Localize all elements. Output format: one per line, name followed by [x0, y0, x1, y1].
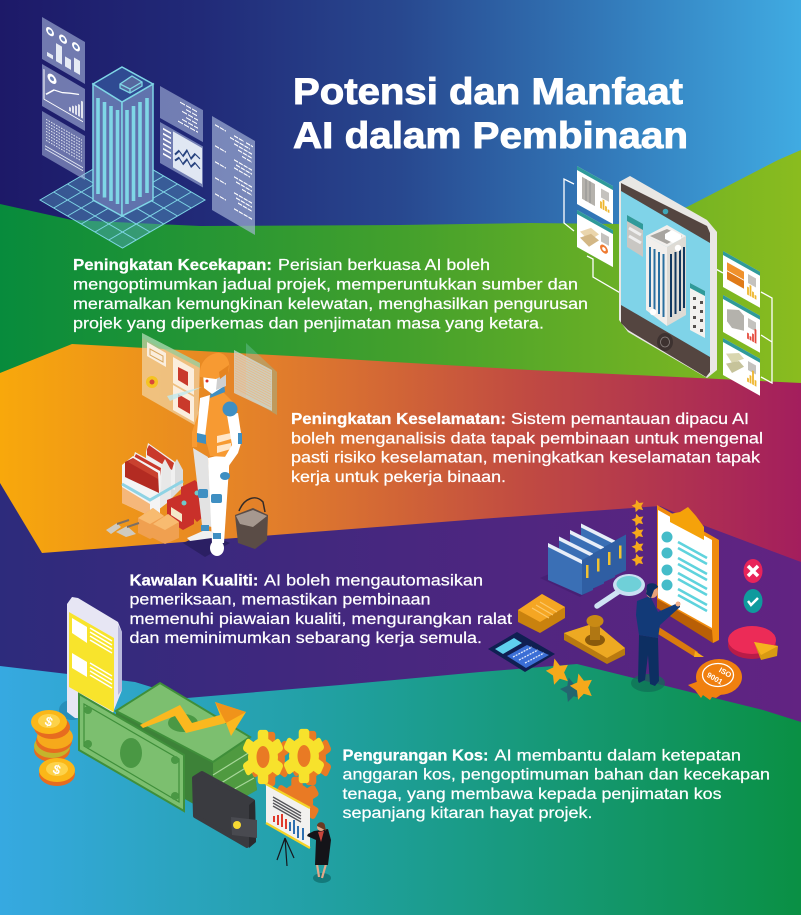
binders	[540, 524, 626, 597]
tablet body	[619, 176, 717, 378]
reject and approve badges	[744, 559, 762, 613]
text block: Pengurangan Kos: Pengurangan Kos:	[342, 747, 488, 764]
background: orange band	[0, 0, 801, 562]
gears	[242, 729, 332, 827]
gold coins: $	[51, 761, 64, 778]
card: orange blocks	[723, 251, 760, 308]
illustration: cost savings	[31, 597, 332, 883]
magnifier	[597, 574, 645, 606]
paint bucket	[235, 498, 268, 549]
illustration: digital building with data panels	[40, 17, 255, 248]
text block: Pengurangan Kos	[342, 747, 770, 822]
text block: Kawalan Kualiti: Kawalan Kualiti:	[130, 572, 258, 590]
pie chart	[728, 626, 778, 660]
panel: long document	[212, 116, 255, 235]
floor grid	[40, 152, 205, 248]
gold stars	[543, 656, 596, 703]
text block: Peningkatan Kecekapan: projek yang diperkemas dan penjimatan masa yang ketara.	[73, 316, 544, 332]
orange notepad	[518, 594, 565, 633]
panel: dense table	[42, 111, 85, 180]
card: stone slabs	[723, 338, 760, 396]
text block: Peningkatan Kecekapan: Peningkatan Kecekapan:	[73, 257, 272, 274]
tablet screen icon grid	[690, 283, 705, 338]
pencil	[637, 615, 704, 657]
text block: Peningkatan Keselamatan: boleh menganalisis data tapak pembinaan untuk mengenal	[291, 430, 763, 447]
growth arrow	[140, 702, 246, 736]
tablet screen form	[627, 215, 643, 257]
connector lines	[564, 179, 772, 383]
text block: Peningkatan Keselamatan: pasti risiko keselamatan, meningkatkan keselamatan tapak	[291, 450, 760, 466]
text block: Kawalan Kualiti: memenuhi piawaian kualiti, mengurangkan ralat	[130, 611, 513, 628]
text block: Kawalan Kualiti	[130, 572, 513, 647]
illustration: tablet with building model	[564, 166, 772, 396]
text block: Pengurangan Kos: tenaga, yang membawa kepada penjimatan kos	[342, 786, 722, 803]
robot figure	[187, 353, 242, 556]
text block: Peningkatan Kecekapan	[73, 257, 588, 332]
brick stacks	[138, 508, 179, 544]
text block: Pengurangan Kos: anggaran kos, pengoptimuman bahan dan kecekapan	[342, 766, 770, 784]
text block: Pengurangan Kos: AI membantu dalam ketepatan	[494, 747, 741, 764]
building	[93, 67, 153, 216]
trowels	[106, 520, 139, 537]
text block: Pengurangan Kos: sepanjang kitaran hayat projek.	[342, 805, 592, 822]
panel: line chart	[42, 64, 85, 131]
panel: area chart	[160, 122, 203, 188]
paint cans	[167, 480, 209, 530]
rating stars column	[630, 498, 645, 567]
text block: Kawalan Kualiti: pemeriksaan, memastikan pembinaan	[130, 592, 430, 609]
holographic data mesh	[234, 343, 277, 415]
text block: Kawalan Kualiti: dan meminimumkan sebarang kerja semula.	[130, 630, 482, 647]
gold coins: $	[43, 713, 56, 730]
red roofed house models	[122, 443, 183, 516]
ISO 9001 badge: ISO	[717, 665, 733, 680]
text block: Peningkatan Keselamatan: Peningkatan Keselamatan:	[291, 411, 506, 428]
smartphone	[59, 597, 122, 720]
text block: Peningkatan Kecekapan: Perisian berkuasa AI boleh	[278, 257, 490, 274]
title: AI dalam Pembinaan	[293, 115, 688, 156]
illustration: robot construction worker	[106, 333, 277, 557]
clipboard	[657, 505, 719, 643]
background: purple band	[0, 0, 801, 722]
ISO 9001 badge	[688, 659, 742, 700]
wallet	[194, 773, 257, 848]
card: sheets	[577, 210, 613, 267]
panel: text list	[160, 86, 203, 142]
text block: Peningkatan Kecekapan: mengoptimumkan jadual projek, memperuntukkan sumber dan	[73, 276, 578, 294]
presenter woman	[307, 822, 331, 883]
text block: Peningkatan Kecekapan: meramalkan kemungkinan kelewatan, menghasilkan pengurusan	[73, 296, 588, 313]
man reviewing	[631, 583, 680, 692]
title: Potensi dan Manfaat	[293, 71, 683, 112]
front banknote	[79, 694, 184, 811]
gold coins	[31, 710, 75, 786]
calculator	[488, 632, 555, 672]
rubber stamp	[564, 615, 625, 664]
card: columns	[577, 166, 613, 224]
text block: Peningkatan Keselamatan	[291, 411, 763, 486]
title	[293, 71, 688, 156]
illustration: quality control	[488, 498, 778, 703]
robot shadow	[183, 533, 230, 557]
presentation board	[266, 784, 310, 866]
ISO 9001 badge: 9001	[705, 670, 724, 687]
background: navy band	[0, 0, 801, 226]
building model	[646, 225, 686, 326]
connector dots	[650, 245, 681, 315]
text block: Peningkatan Keselamatan: kerja untuk pekerja binaan.	[291, 469, 506, 486]
holographic panel	[142, 333, 202, 427]
panel: bar metrics	[42, 17, 85, 84]
text block: Peningkatan Keselamatan: Sistem pemantauan dipacu AI	[511, 411, 749, 428]
card: concrete block	[723, 295, 760, 353]
background: green band	[0, 0, 801, 383]
text block: Kawalan Kualiti: AI boleh mengautomasikan	[264, 572, 483, 590]
banknote stack	[116, 683, 257, 815]
